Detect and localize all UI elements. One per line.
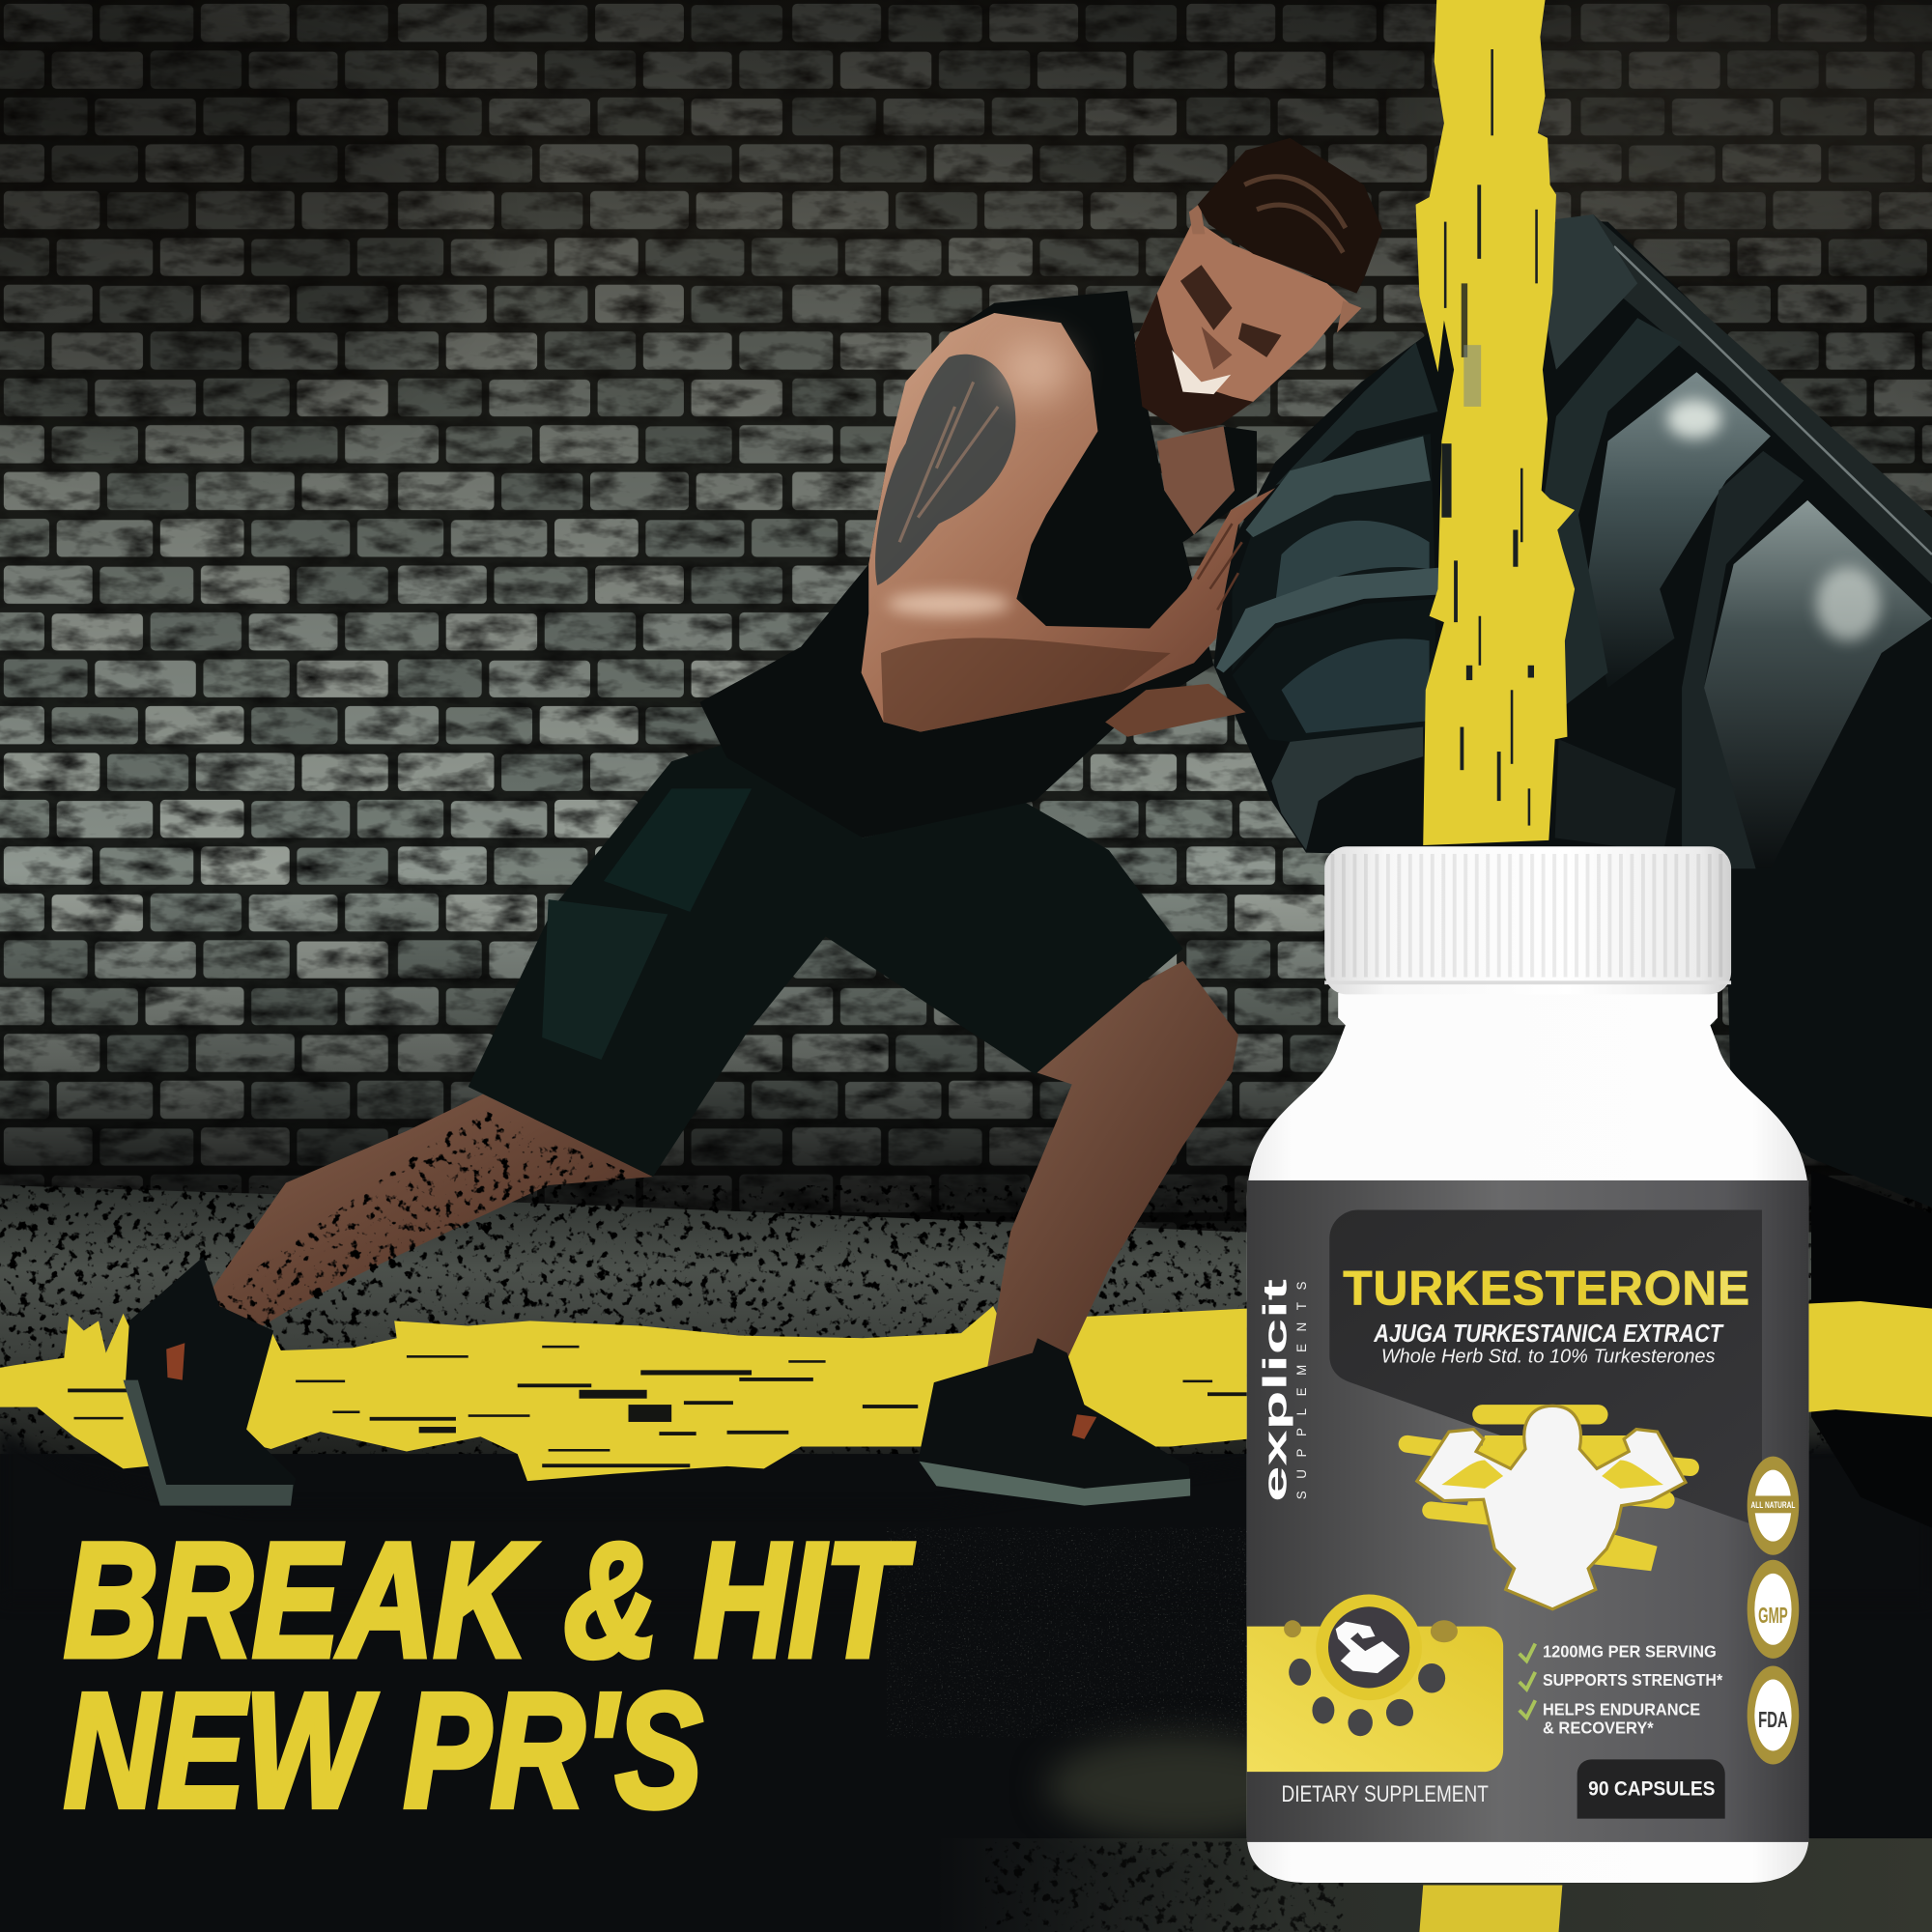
brand logo xyxy=(1258,1278,1309,1502)
back shoe accent xyxy=(166,1343,185,1380)
bottle body xyxy=(1247,993,1808,1883)
back leg xyxy=(185,1094,653,1343)
hair xyxy=(1198,138,1382,294)
benefit text: & RECOVERY* xyxy=(1543,1719,1654,1738)
yellow brush stroke: below bottle xyxy=(1419,1886,1562,1932)
yellow brush stroke: horizontal xyxy=(0,1306,1247,1481)
yellow brush stroke: vertical xyxy=(1416,0,1575,845)
product title: TURKESTERONE xyxy=(1343,1262,1749,1316)
chest skin xyxy=(1157,426,1235,535)
benefit text: 1200MG PER SERVING xyxy=(1543,1642,1717,1662)
label dark panel xyxy=(1329,1210,1762,1528)
brow and eye shadows xyxy=(1180,265,1282,357)
front shoe sole xyxy=(920,1462,1190,1506)
all natural badge: ALL NATURAL xyxy=(1750,1500,1796,1510)
brand logo: explicit xyxy=(1258,1278,1294,1502)
FDA badge xyxy=(1747,1665,1799,1765)
label xyxy=(1247,1180,1808,1842)
background: ground xyxy=(0,1185,1932,1932)
fingers xyxy=(1198,524,1242,610)
all natural badge xyxy=(1747,1457,1799,1555)
dots xyxy=(1284,1620,1458,1736)
front shoe accent xyxy=(1072,1414,1096,1439)
GMP badge: GMP xyxy=(1758,1603,1788,1628)
benefit text: HELPS ENDURANCE xyxy=(1543,1700,1700,1719)
back shoe xyxy=(126,1257,296,1506)
shorts xyxy=(469,739,1182,1177)
tattoo xyxy=(875,355,1015,585)
cap xyxy=(1324,846,1731,994)
background: brick wall xyxy=(0,0,1932,1244)
yellow brush stroke: right of bottle xyxy=(1808,1301,1932,1417)
benefit checkmarks xyxy=(1520,1644,1535,1718)
beard xyxy=(1135,294,1253,433)
hair highlight xyxy=(1244,177,1346,252)
headline: NEW PR'S xyxy=(64,1660,702,1841)
tire xyxy=(1213,214,1932,1528)
arm badge xyxy=(1316,1595,1422,1700)
benefit text: SUPPORTS STRENGTH* xyxy=(1543,1670,1722,1690)
headline xyxy=(64,1509,914,1841)
front leg xyxy=(985,961,1238,1378)
arm icon xyxy=(1336,1622,1400,1673)
extract name: AJUGA TURKESTANICA EXTRACT xyxy=(1373,1321,1724,1348)
benefit text xyxy=(1543,1642,1722,1738)
forearm shadow xyxy=(881,638,1171,732)
under arm xyxy=(1105,684,1246,737)
ears xyxy=(1189,203,1361,332)
shirt xyxy=(699,291,1257,838)
arm xyxy=(862,313,1275,732)
shorts lit edge xyxy=(604,788,752,912)
headline: BREAK & HIT xyxy=(64,1509,914,1690)
brand logo: SUPPLEMENTS xyxy=(1294,1281,1309,1499)
leg speckles xyxy=(217,1111,647,1327)
capsule count xyxy=(1577,1759,1725,1819)
face xyxy=(1135,219,1350,431)
GMP badge xyxy=(1747,1560,1799,1659)
standardisation note: Whole Herb Std. to 10% Turkesterones xyxy=(1381,1347,1716,1368)
supplement bottle xyxy=(1247,846,1808,1883)
dietary supplement text: DIETARY SUPPLEMENT xyxy=(1282,1781,1489,1807)
FDA badge: FDA xyxy=(1758,1707,1788,1732)
shorts pocket xyxy=(542,899,668,1060)
athlete xyxy=(124,138,1382,1506)
capsule count: 90 CAPSULES xyxy=(1588,1776,1716,1800)
flexing figure icon xyxy=(1397,1405,1700,1609)
mouth xyxy=(1172,350,1231,394)
nose shadow xyxy=(1202,327,1233,370)
shoulder highlight xyxy=(1001,340,1069,399)
back shoe sole xyxy=(124,1380,294,1506)
forearm highlight xyxy=(887,591,1010,616)
front shoe xyxy=(918,1338,1190,1506)
yellow panel xyxy=(1247,1595,1503,1772)
